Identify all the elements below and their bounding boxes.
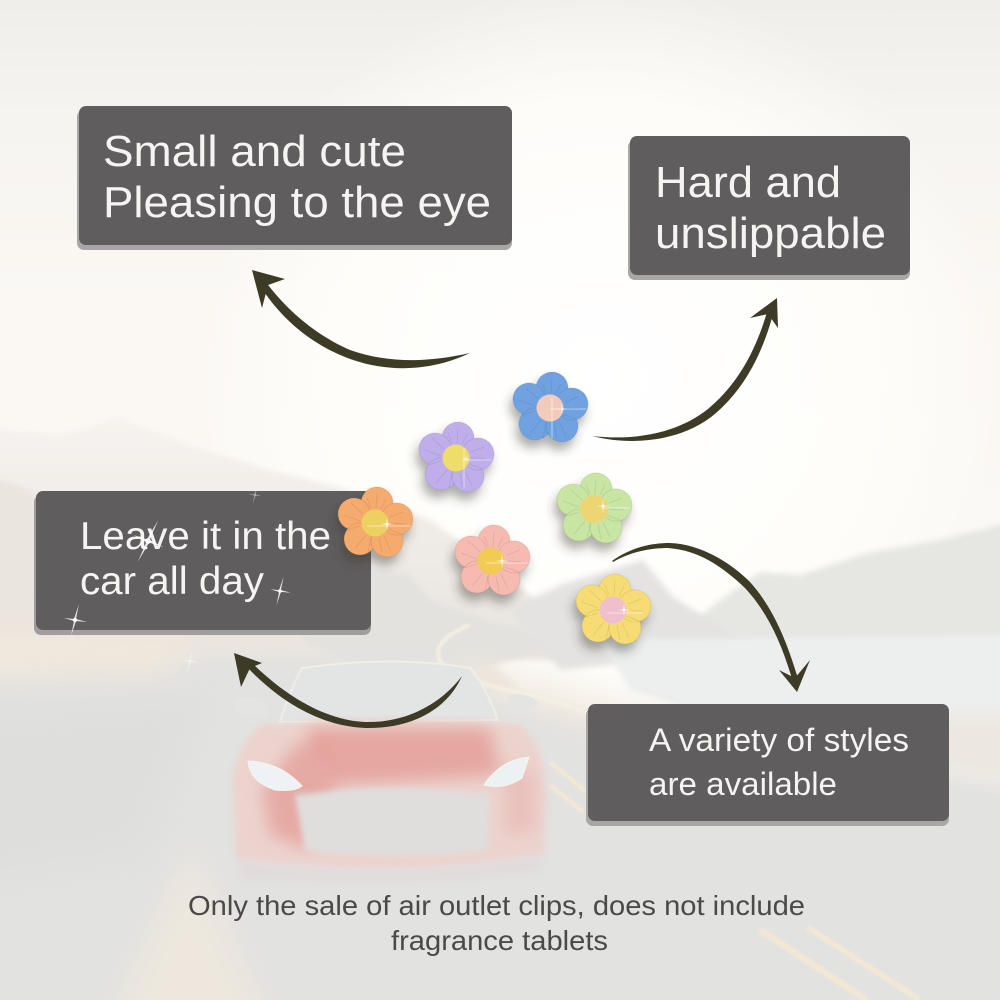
yellow road lines — [550, 762, 920, 1000]
icon: yellow flower — [576, 574, 651, 644]
body — [232, 722, 546, 869]
footnote — [188, 890, 805, 956]
text: pleasing to the eye: Pleasing to the eye — [103, 178, 491, 227]
text: are available: are available — [649, 766, 837, 802]
windshield and roof — [280, 662, 498, 722]
footnote line 1: Only the sale of air outlet clips, does not include — [188, 890, 805, 921]
warm road glow — [0, 630, 690, 1000]
text: a variety of styles: A variety of styles — [649, 722, 909, 758]
beach right — [880, 715, 1000, 790]
near hills left — [0, 465, 520, 760]
car — [232, 662, 546, 883]
footnote line 2: fragrance tablets — [391, 925, 608, 956]
arrow: to small and cute — [252, 270, 470, 368]
icon: blue flower — [513, 372, 588, 442]
panel: variety of styles — [586, 704, 949, 826]
mirrors — [233, 698, 268, 717]
text: car all day: car all day — [80, 560, 265, 603]
dark road left — [0, 700, 200, 880]
distant mountains left — [0, 418, 620, 660]
text: hard and: Hard and — [655, 158, 841, 207]
panel: small and cute — [77, 106, 512, 250]
right headlight — [484, 757, 529, 786]
road edge curve — [438, 625, 620, 728]
panel: leave it in the car — [34, 485, 371, 672]
text: unslippable: unslippable — [655, 209, 886, 258]
grille — [295, 788, 490, 856]
left headlight — [248, 761, 302, 790]
mid hills — [300, 570, 570, 690]
icon: pink flower — [455, 525, 530, 595]
road and foreground — [0, 655, 1000, 1000]
text: small and cute: Small and cute — [103, 127, 406, 176]
icon: purple flower — [419, 422, 494, 492]
arrow: to leave it in the car — [234, 653, 462, 728]
icon: green flower — [557, 473, 632, 543]
centre mountain — [510, 560, 745, 670]
icon: orange flower — [338, 487, 413, 557]
panel: hard and unslippable — [628, 136, 910, 280]
sparkles — [64, 485, 291, 672]
front skirt — [238, 852, 544, 883]
arrow: to hard and unslippable — [592, 298, 778, 441]
arrow: to variety of styles — [612, 543, 810, 692]
text: leave it in the: Leave it in the — [80, 515, 331, 558]
water — [600, 634, 1000, 725]
mountains right — [660, 515, 1000, 650]
red shading — [262, 728, 535, 850]
